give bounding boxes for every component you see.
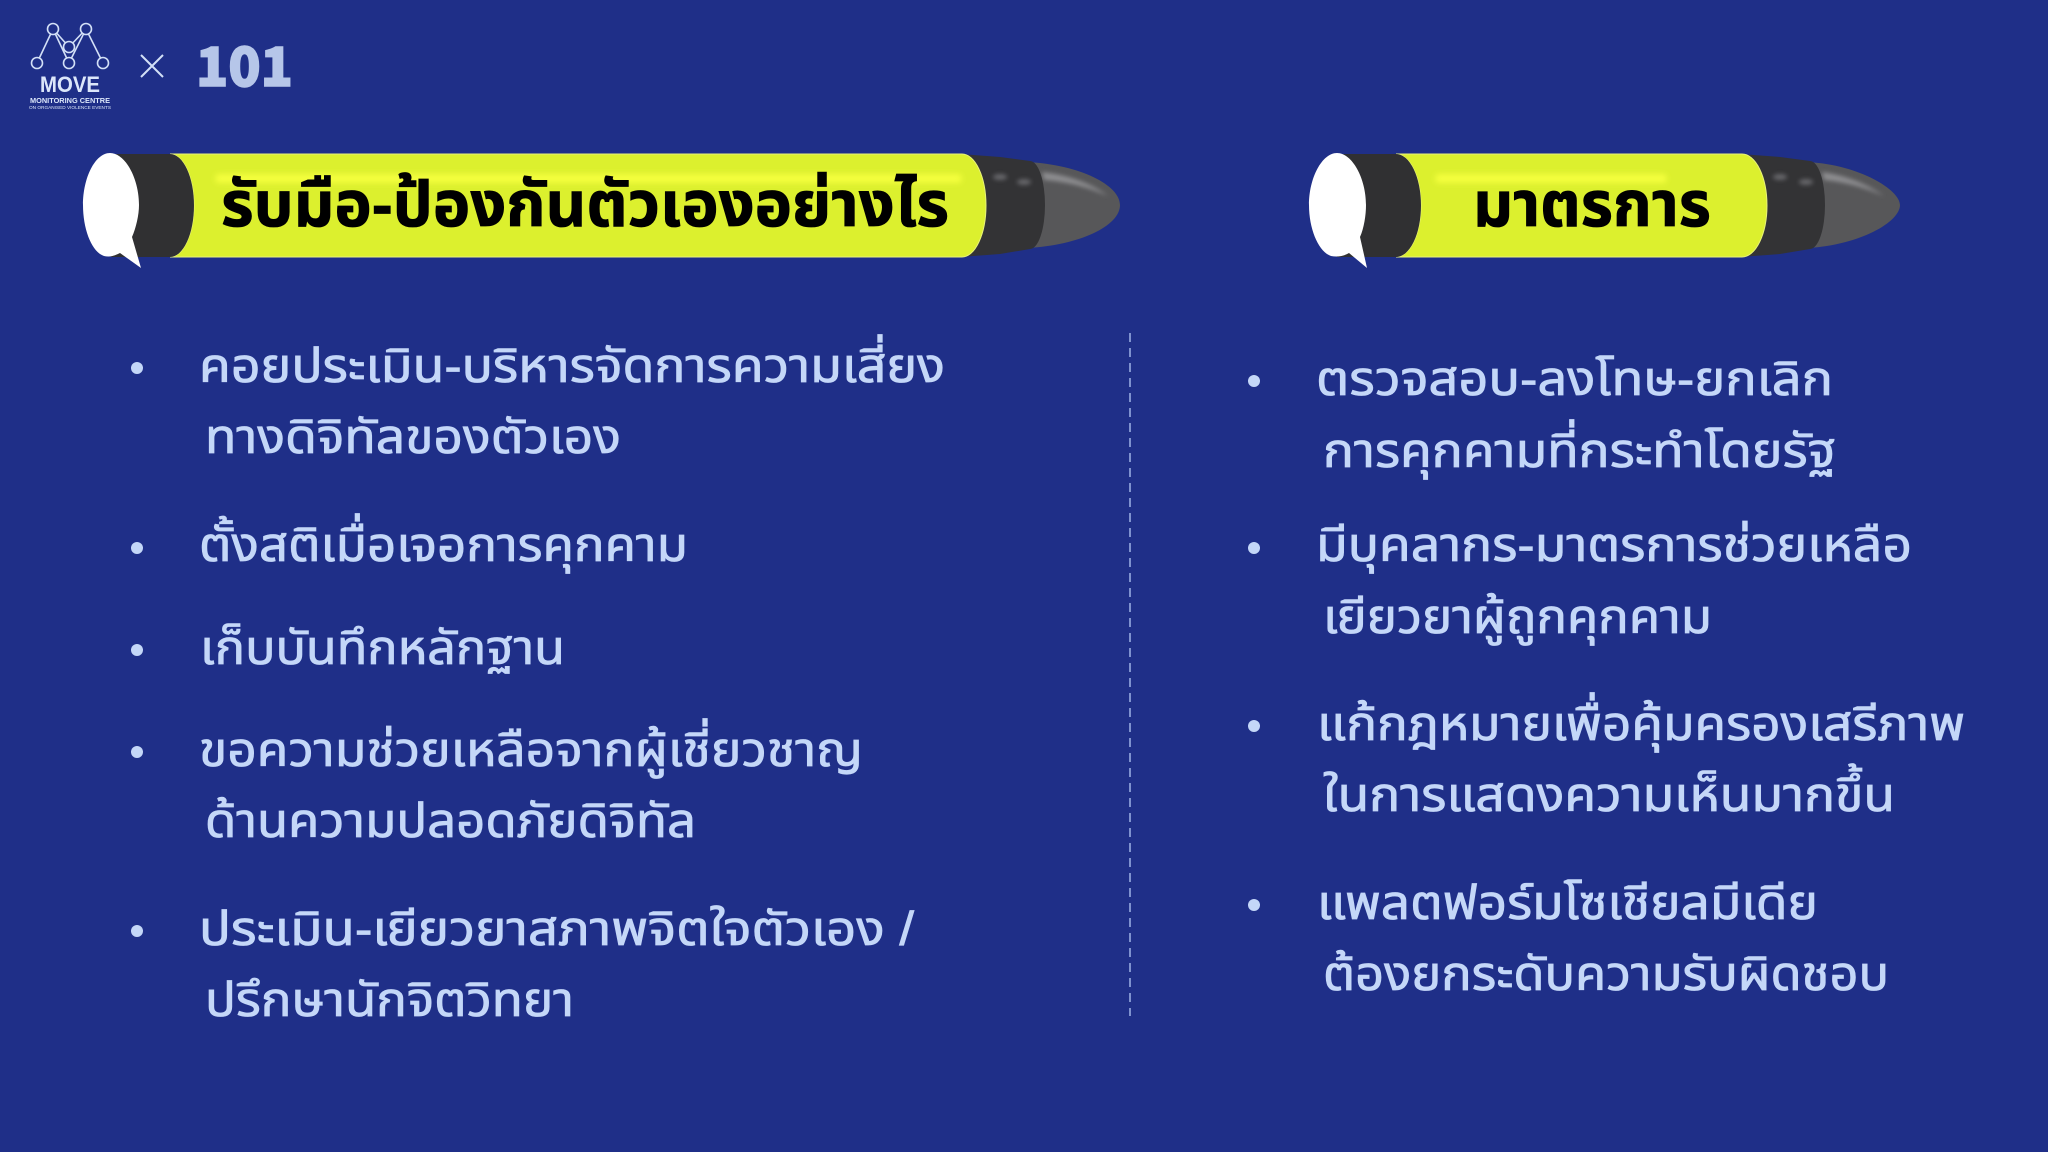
pen tip [1808, 162, 1900, 248]
bullet item 4: ด้านความปลอดภัยดิจิทัล [205, 794, 696, 847]
bullet item 3 [1248, 692, 1965, 821]
logo: 101: 101 [196, 23, 293, 102]
bullet item 4: ต้องยกระดับความรับผิดชอบ [1323, 947, 1889, 1000]
pen highlight [215, 174, 962, 183]
bullet item 4 [131, 718, 863, 847]
bullet item 2: ตั้งสติเมื่อเจอการคุกคาม [199, 513, 688, 573]
pen body [170, 154, 986, 257]
bullet item 1: ทางดิจิทัลของตัวเอง [205, 410, 621, 463]
pen end band [111, 154, 194, 257]
bullet item 4: แพลตฟอร์มโซเชียลมีเดีย [1317, 876, 1818, 929]
pen collar [1740, 154, 1825, 257]
heading text: มาตรการ [1473, 170, 1711, 240]
logo: MOVE monitoring centre [29, 24, 111, 110]
bullet item 1: การคุกคามที่กระทำโดยรัฐ [1323, 419, 1836, 479]
bullet item 4 [1248, 876, 1889, 1000]
divider [1129, 333, 1131, 1016]
bullet item 3: เก็บบันทึกหลักฐาน [200, 621, 565, 674]
logo: MOVE monitoring centre: MONITORING CENTRE [30, 96, 110, 105]
pen body [1396, 154, 1767, 257]
icon: times sign [141, 55, 163, 77]
speech bubble [83, 153, 141, 268]
bullet item 2: มีบุคลากร-มาตรการช่วยเหลือ [1316, 518, 1912, 573]
bullet item 2 [1248, 518, 1912, 645]
bullet item 1: ตรวจสอบ-ลงโทษ-ยกเลิก [1316, 352, 1833, 405]
pen highlight [1435, 174, 1667, 183]
bullet item 1 [131, 334, 945, 463]
bullet item 1 [1248, 352, 1836, 479]
pen collar [960, 154, 1045, 257]
panel heading: left marker pen [83, 153, 1120, 268]
logo: MOVE monitoring centre: ON ORGANISED VIOLENCE EVENTS [29, 105, 111, 110]
speech bubble [1309, 153, 1367, 268]
bullet item 3: ในการแสดงความเห็นมากขึ้น [1323, 763, 1895, 821]
panel heading: right marker pen [1309, 153, 1900, 268]
pen end band [1337, 154, 1421, 257]
bullet item 5: ประเมิน-เยียวยาสภาพจิตใจตัวเอง / [199, 902, 915, 955]
logo: MOVE monitoring centre: MOVE [40, 72, 100, 97]
pen tip [1028, 162, 1120, 248]
bullet item 4: ขอความช่วยเหลือจากผู้เชี่ยวชาญ [199, 718, 863, 778]
bullet item 5: ปรึกษานักจิตวิทยา [205, 973, 574, 1026]
bullet item 5 [131, 902, 915, 1026]
list: left column [131, 334, 945, 1026]
bullet item 1: คอยประเมิน-บริหารจัดการความเสี่ยง [199, 334, 945, 392]
bullet item 2: เยียวยาผู้ถูกคุกคาม [1323, 590, 1712, 645]
list: right column [1248, 352, 1965, 1000]
bullet item 3: แก้กฎหมายเพื่อคุ้มครองเสรีภาพ [1317, 692, 1965, 752]
heading text: รับมือ-ป้องกันตัวเองอย่างไร [221, 170, 949, 240]
